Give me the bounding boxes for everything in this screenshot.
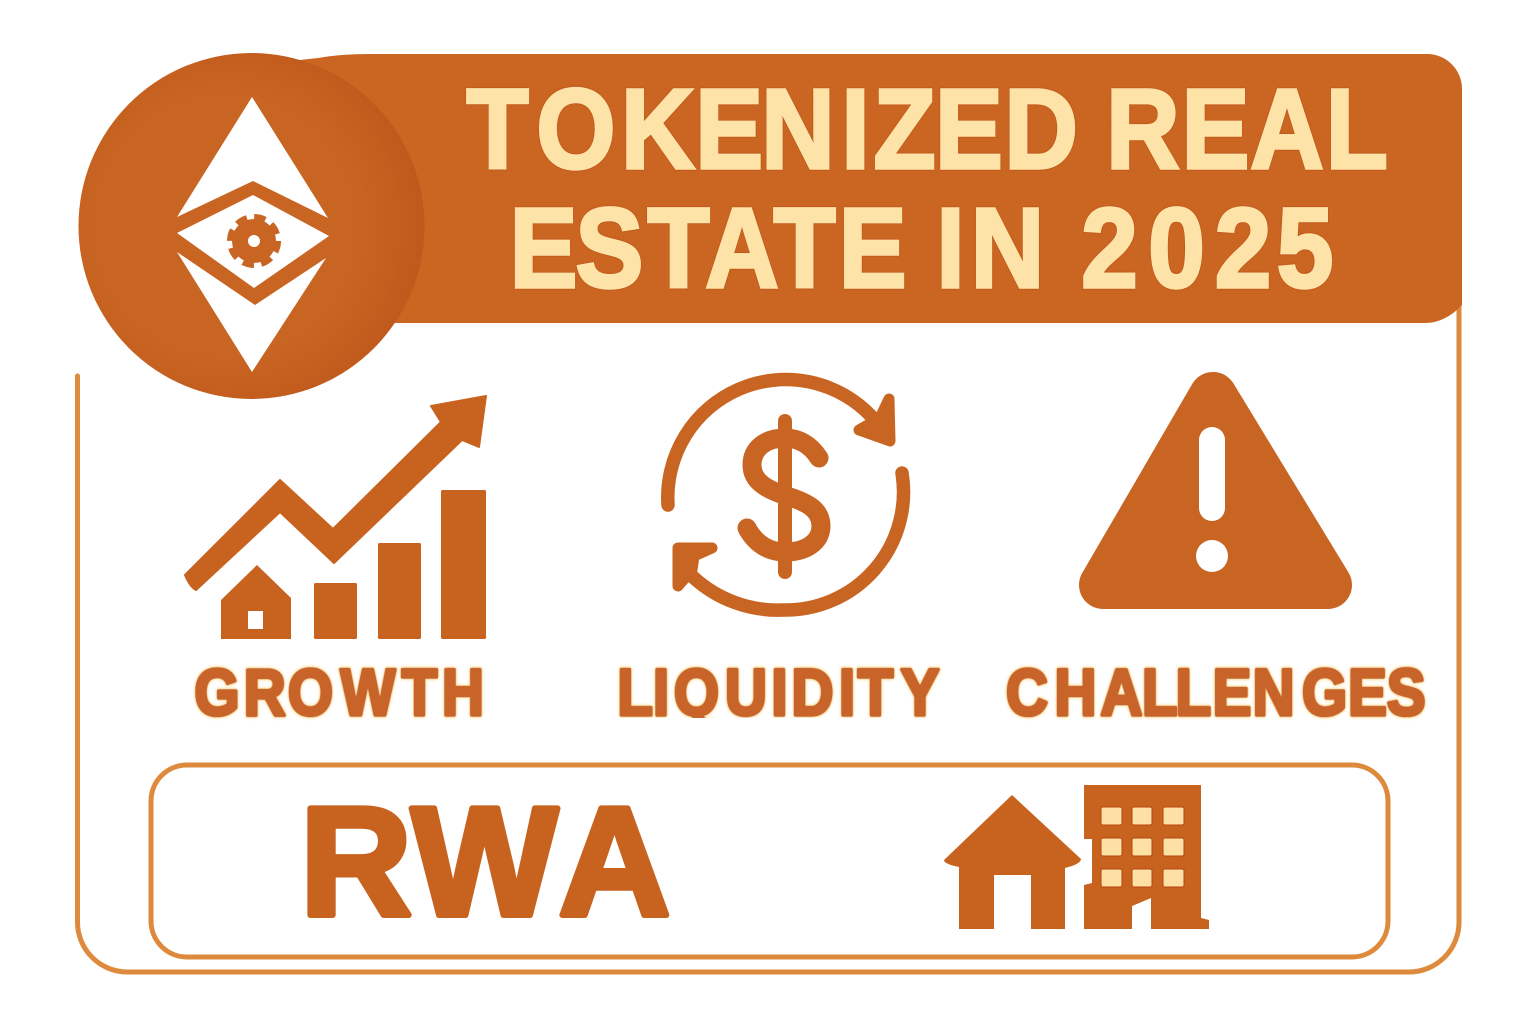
icon: office building [1084,785,1209,929]
title banner [300,54,1462,323]
icon: warning triangle [1103,396,1328,585]
outer frame [78,300,1459,972]
RWA label: RWA [300,775,670,948]
icon: ethereum diamond middle [177,195,329,288]
trend arrow [185,396,486,590]
icon: ethereum diamond top [177,97,328,218]
heading: challenges: CHALLENGES [1006,657,1426,730]
panel: RWA [151,765,1388,957]
bar large [441,490,486,639]
exclamation mark [1196,427,1228,572]
house bar [221,565,291,639]
icon: liquidity cycle [668,380,904,610]
heading: growth: GROWTH [194,657,484,730]
icon: ethereum diamond bottom [177,252,326,372]
title [466,66,1388,311]
icon: dollar sign [747,421,821,572]
heading: liquidity: LIQUIDITY [617,657,939,730]
title: TOKENIZED REAL [466,66,1388,192]
bar medium [378,543,421,639]
lower arc arrow [678,473,904,610]
title: ESTATE IN 2025 [510,185,1333,311]
upper arc arrow [668,380,890,505]
icon: house [944,795,1081,929]
bar small [314,583,357,639]
token emblem circle [78,53,424,399]
building windows [1101,807,1184,887]
icon: growth chart [185,396,486,639]
icon: gear [230,217,278,265]
